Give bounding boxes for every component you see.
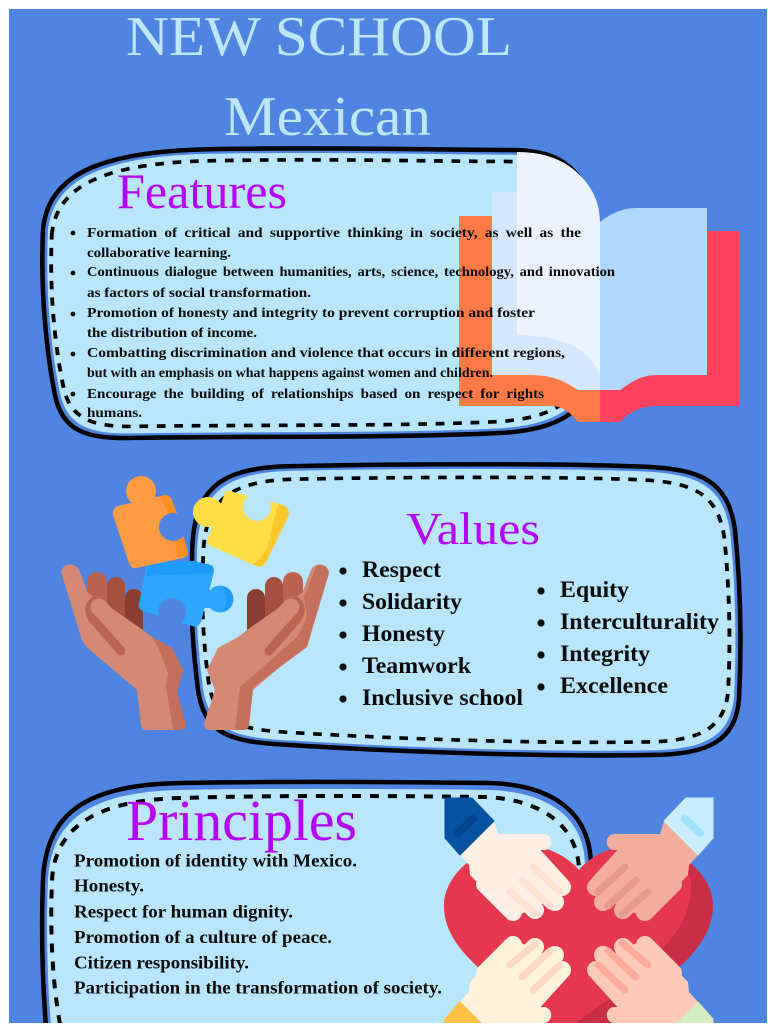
values list: column two: Integrity [560,641,651,666]
principles list: Honesty. [74,876,144,896]
values list: column one: Inclusive school [362,685,523,710]
title: NEW SCHOOL [126,6,512,68]
icon: hands with puzzle pieces [61,476,329,730]
values list: column one: Teamwork [362,653,471,678]
left hand [61,565,186,730]
puzzle piece: yellow [193,490,289,567]
title: Mexican [224,86,431,148]
features list: collaborative learning. [87,245,231,260]
panel: values [191,464,740,755]
hand: top right [596,798,713,918]
values list: column two: Excellence [560,673,668,698]
features list: the distribution of income. [87,325,257,340]
values list: column one [339,557,523,710]
values list: column one: Respect [362,557,441,582]
puzzle piece: orange [113,476,188,568]
features list: humans. [87,405,142,420]
heading: principles: Principles [126,788,357,853]
features list: Continuous dialogue between humanities, arts, science, technology, and innovation [87,264,616,279]
icon: hands over heart [444,798,713,1024]
values list: column one: Honesty [362,621,446,646]
puzzle piece: blue [139,561,234,626]
features list: Combatting discrimination and violence that occurs in different regions, [87,345,565,360]
principles list: Participation in the transformation of society. [74,978,442,998]
icon: open book [459,152,739,422]
features list: but with an emphasis on what happens against women and children. [87,365,493,380]
heart [444,845,713,1024]
values list: column two [537,577,720,698]
panel: features [42,148,592,438]
hand: bottom left [445,939,562,1024]
heading: features: Features [117,163,287,219]
features list: Formation of critical and supportive thinking in society, as well as the [87,225,581,240]
values list: column two: Interculturality [560,609,720,634]
hand: top left [445,798,562,918]
principles list: Promotion of a culture of peace. [74,927,332,947]
values list: column two: Equity [560,577,630,602]
principles list: Citizen responsibility. [74,952,249,972]
title [126,6,512,148]
features list: as factors of social transformation. [87,285,311,300]
principles list: Promotion of identity with Mexico. [74,850,357,870]
features list: Promotion of honesty and integrity to prevent corruption and foster [87,305,535,320]
features list [71,225,616,420]
heading: values: Values [406,503,540,554]
right hand [204,565,329,730]
values list: column one: Solidarity [362,589,463,614]
principles list [74,850,442,998]
hand: bottom right [596,939,713,1024]
panel: principles [42,782,591,1024]
principles list: Respect for human dignity. [74,902,293,922]
features list: Encourage the building of relationships based on respect for rights [87,386,544,401]
